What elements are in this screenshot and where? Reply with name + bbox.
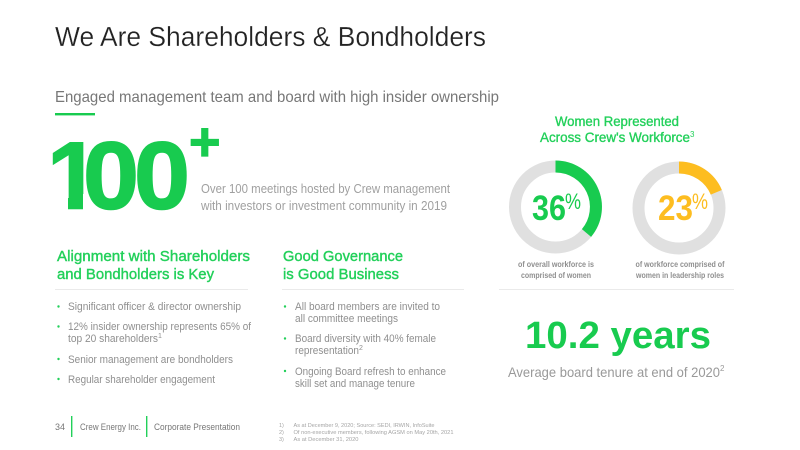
caption: 36% xyxy=(518,259,594,280)
subtitle: Engaged management team and board with high insider ownership xyxy=(55,89,499,106)
bullet list: governance: 2 xyxy=(359,345,363,352)
heading: governance: is Good Business xyxy=(283,266,399,283)
heading: women represented: Across Crew's Workforce xyxy=(540,129,690,145)
bullet list: governance xyxy=(284,301,446,390)
caption: 36%: comprised of women xyxy=(521,270,591,280)
footnotes: 2) xyxy=(279,430,284,436)
big stat: 100+: 1 xyxy=(47,122,100,230)
footer: 34 xyxy=(55,422,65,433)
bullet list: alignment: top 20 shareholders xyxy=(68,333,158,345)
panel: governance xyxy=(282,248,464,390)
footer xyxy=(55,416,240,437)
donut chart: 23%: % xyxy=(692,189,708,214)
donut chart: 36% xyxy=(515,166,596,248)
big stat: 100+: + xyxy=(189,112,221,172)
donut chart: 36%: % xyxy=(565,189,581,214)
caption: 23%: women in leadership roles xyxy=(635,270,724,280)
panel: alignment xyxy=(55,248,252,386)
donut chart: 36%: 36 xyxy=(532,189,566,228)
footnotes: As at December 9, 2020; Source: SEDI, IRWIN, InfoSuite xyxy=(294,423,434,429)
bullet list: alignment: Senior management are bondholders xyxy=(68,354,233,366)
stat description xyxy=(200,182,450,213)
caption: 36%: of overall workforce is xyxy=(518,259,594,269)
stat description: Over 100 meetings hosted by Crew management xyxy=(201,182,450,196)
footer: Crew Energy Inc. xyxy=(80,422,141,433)
bullet list: alignment: Regular shareholder engagement xyxy=(68,374,216,386)
bullet list: governance: all committee meetings xyxy=(295,313,398,325)
donut chart: 23%: 23 xyxy=(658,189,693,228)
footer: Corporate Presentation xyxy=(154,422,240,433)
bullet list: governance: representation xyxy=(295,345,359,357)
big stat: board tenure: 10.2 years xyxy=(525,315,711,357)
big stat: 100+ xyxy=(52,128,219,210)
heading: alignment xyxy=(57,248,250,283)
bullet list: alignment xyxy=(57,301,252,386)
heading: alignment: Alignment with Shareholders xyxy=(57,248,250,265)
footnotes: 1) xyxy=(279,423,284,429)
tenure description: 2 xyxy=(720,364,725,373)
footnotes xyxy=(279,423,454,443)
title: We Are Shareholders & Bondholders xyxy=(55,21,486,52)
big stat: 100+: 0 xyxy=(83,122,139,229)
heading: women represented: 3 xyxy=(690,130,695,139)
footnotes: Of non-executive members, following AGSM on May 20th, 2021 xyxy=(294,430,454,436)
heading: alignment: and Bondholders is Key xyxy=(57,266,214,283)
heading: governance: Good Governance xyxy=(283,248,403,265)
stat description: with investors or investment community in 2019 xyxy=(200,199,447,213)
footnotes: As at December 31, 2020 xyxy=(294,437,358,443)
heading: women represented xyxy=(540,113,695,145)
donut chart: 23% xyxy=(638,168,720,248)
bullet list: governance: Board diversity with 40% female xyxy=(295,333,436,345)
caption: 23%: of workforce comprised of xyxy=(636,259,725,269)
tenure description: Average board tenure at end of 2020 xyxy=(508,364,720,380)
footnotes: 3) xyxy=(279,437,284,443)
bullet list: alignment: 1 xyxy=(158,333,162,340)
accent rule xyxy=(55,113,95,115)
bullet list: governance: All board members are invited to xyxy=(295,301,440,313)
bullet list: governance: Ongoing Board refresh to enhance xyxy=(295,366,446,378)
caption: 23% xyxy=(635,259,725,280)
bullet list: alignment: Significant officer & director ownership xyxy=(68,301,241,313)
heading: governance xyxy=(283,248,403,283)
big stat: 100+: 0 xyxy=(134,122,190,229)
bullet list: alignment: 12% insider ownership represents 65% of xyxy=(68,321,252,333)
bullet list: governance: skill set and manage tenure xyxy=(295,378,415,390)
heading: women represented: Women Represented xyxy=(555,113,679,129)
